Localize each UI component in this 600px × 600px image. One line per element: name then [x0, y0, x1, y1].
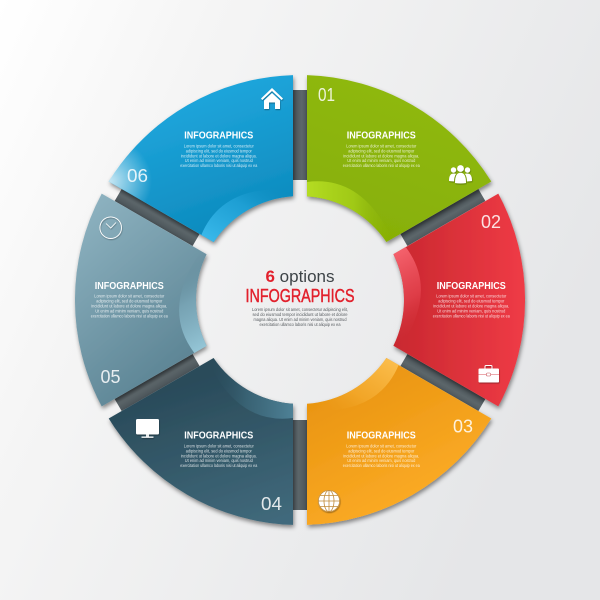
icon: clock — [100, 217, 121, 238]
segment 05 slate — [75, 194, 246, 406]
heading 06: INFOGRAPHICS — [184, 130, 253, 142]
segment 02 red — [354, 194, 525, 406]
text 06: adipiscing elit, sed do eiusmod tempor — [186, 148, 252, 154]
center text: magna aliqua. Ut enim ad minim veniam, quis nostrud — [254, 317, 347, 322]
icon: globe — [318, 490, 340, 512]
text 01: Ut enim ad minim veniam, quis nostrud — [347, 158, 416, 163]
center text — [252, 307, 348, 327]
text 06 — [180, 144, 258, 168]
icon: briefcase — [478, 366, 499, 382]
number 04: 04 — [261, 494, 282, 514]
heading 04: INFOGRAPHICS — [184, 430, 253, 442]
segment 01 green — [307, 75, 491, 242]
text 04 — [180, 444, 258, 468]
text 01: Lorem ipsum dolor sit amet, consectetur — [346, 144, 417, 148]
text 04: exercitation ullamco laboris nisi ut aliquip ex ea — [180, 463, 258, 468]
text 01: adipiscing elit, sed do eiusmod tempor — [348, 148, 415, 154]
segment 06 blue — [109, 75, 296, 265]
text 06: Lorem ipsum dolor sit amet, consectetur — [184, 144, 254, 148]
text 01: exercitation ullamco laboris nisi ut aliquip ex ea — [343, 163, 420, 168]
center text: exercitation ullamco laboris nisi ut aliquip ex ea — [260, 322, 341, 327]
text 01 — [343, 144, 420, 168]
connector strips — [115, 90, 485, 510]
text 02: Lorem ipsum dolor sit amet, consectetur — [436, 294, 507, 298]
text 02: adipiscing elit, sed do eiusmod tempor — [438, 298, 505, 304]
icon: house — [261, 88, 283, 109]
text 02: exercitation ullamco laboris nisi ut aliquip ex ea — [433, 314, 510, 318]
text 05: exercitation ullamco laboris nisi ut aliquip ex ea — [91, 314, 168, 318]
text 06: Ut enim ad minim veniam, quis nostrud — [185, 158, 253, 163]
text 04: Ut enim ad minim veniam, quis nostrud — [185, 458, 253, 463]
center title — [246, 267, 354, 306]
text 03: exercitation ullamco laboris nisi ut aliquip ex ea — [343, 463, 420, 468]
number 03: 03 — [453, 416, 473, 436]
text 03: adipiscing elit, sed do eiusmod tempor — [348, 448, 415, 454]
icon: people — [449, 165, 472, 184]
text 03: Ut enim ad minim veniam, quis nostrud — [347, 458, 416, 463]
text 02 — [433, 294, 510, 318]
segment 04 dark teal — [109, 358, 293, 525]
text 05: incididunt ut labore et dolore magna aliqua. — [91, 304, 167, 308]
text 05: Lorem ipsum dolor sit amet, consectetur — [94, 294, 165, 298]
number 02: 02 — [481, 212, 501, 232]
number 05: 05 — [100, 367, 120, 387]
segment 03 orange — [304, 335, 491, 525]
heading 02: INFOGRAPHICS — [437, 280, 506, 292]
number 01: 01 — [318, 85, 335, 105]
text 05 — [91, 294, 168, 318]
center title: INFOGRAPHICS — [246, 285, 354, 306]
text 05: Ut enim ad minim veniam, quis nostrud — [95, 308, 164, 314]
text 03: Lorem ipsum dolor sit amet, consectetur — [346, 444, 417, 448]
center text: Lorem ipsum dolor sit amet, consectetur adipiscing elit, — [252, 307, 348, 312]
text 05: adipiscing elit, sed do eiusmod tempor — [96, 298, 163, 304]
text 06: incididunt ut labore et dolore magna aliqua. — [181, 154, 257, 158]
text 02: incididunt ut labore et dolore magna aliqua. — [433, 304, 509, 308]
center title: 6 options — [266, 267, 334, 286]
heading 01: INFOGRAPHICS — [347, 130, 416, 142]
icon: monitor — [136, 419, 159, 438]
text 04: adipiscing elit, sed do eiusmod tempor — [186, 448, 252, 454]
text 06: exercitation ullamco laboris nisi ut aliquip ex ea — [180, 163, 258, 168]
heading 05: INFOGRAPHICS — [95, 280, 164, 292]
text 04: Lorem ipsum dolor sit amet, consectetur — [184, 444, 254, 448]
number 06: 06 — [127, 166, 148, 186]
center text: sed do eiusmod tempor incididunt ut labore et dolore — [252, 312, 348, 317]
text 02: Ut enim ad minim veniam, quis nostrud — [437, 308, 506, 314]
text 03: incididunt ut labore et dolore magna aliqua. — [343, 454, 419, 458]
text 01: incididunt ut labore et dolore magna aliqua. — [343, 154, 419, 158]
text 04: incididunt ut labore et dolore magna aliqua. — [181, 454, 257, 458]
heading 03: INFOGRAPHICS — [347, 430, 416, 442]
text 03 — [343, 444, 420, 468]
